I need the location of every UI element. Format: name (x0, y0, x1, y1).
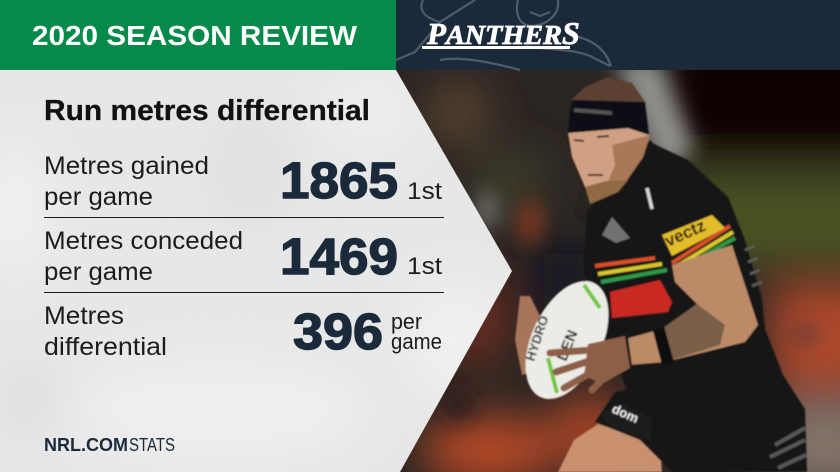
unit: per (391, 309, 422, 334)
ball green trim (548, 285, 600, 393)
value: 396 (293, 303, 383, 360)
eyes and mouth (574, 136, 609, 175)
panther line-art watermark (396, 0, 611, 70)
player (509, 77, 807, 472)
neck (646, 140, 654, 150)
shorts (595, 370, 807, 472)
team logo: Panthers wordmark: PANTHERS (426, 15, 580, 51)
label: per game (44, 183, 153, 211)
tattoo (662, 304, 725, 362)
value: 1469 (280, 228, 398, 285)
wristband (653, 326, 674, 365)
leg (558, 424, 662, 472)
face (567, 126, 650, 188)
row: metres differential (44, 302, 442, 361)
back hand (515, 296, 540, 375)
label: differential (44, 333, 167, 361)
value: 1865 (280, 152, 398, 209)
label: Metres (44, 302, 124, 330)
row: metres gained per game (44, 152, 442, 211)
row: metres conceded per game (44, 227, 442, 286)
wrist strap (624, 337, 632, 366)
rank: 1st (407, 253, 442, 280)
headband shine (574, 110, 612, 113)
left stats panel background (0, 70, 520, 472)
jersey (583, 143, 783, 405)
collar logo (647, 188, 652, 209)
title: 2020 SEASON REVIEW (32, 20, 358, 51)
beard (585, 180, 628, 204)
shorts logo (622, 418, 634, 424)
face shadow (608, 134, 650, 182)
source logo: NRL.COM Stats: STATS (129, 435, 175, 455)
sleeve sponsor (662, 215, 725, 256)
jersey side stripes (745, 246, 762, 286)
label: Metres gained (44, 152, 209, 180)
source logo: NRL.COM Stats: NRL.COM (44, 435, 128, 455)
jersey stripes (595, 226, 735, 282)
ball lettering: STEEDEN: DEN (554, 328, 582, 363)
label: Metres conceded (44, 227, 243, 255)
ball lettering: HYDRO: HYDRO (523, 314, 551, 363)
panther crest (602, 217, 630, 243)
unit: game (391, 329, 442, 354)
hair (571, 77, 645, 102)
header bar: green title block (0, 0, 396, 70)
sponsor text on sleeve: vectz (662, 216, 708, 251)
arm with tattoos (625, 245, 758, 365)
photo background: blurred crowd and field (395, 30, 840, 472)
shorts logo text: dom (610, 401, 641, 426)
header bar: navy team block (396, 0, 840, 70)
rugby ball (524, 280, 610, 400)
rank: 1st (407, 178, 442, 205)
red chest logo (610, 280, 672, 318)
panel heading: Run metres differential (44, 95, 370, 127)
label: per game (44, 258, 153, 286)
front hand with fingers (550, 336, 630, 390)
shorts side stripes (770, 428, 806, 468)
photo: rugby league player running with ball (395, 30, 840, 472)
headband (568, 100, 649, 135)
